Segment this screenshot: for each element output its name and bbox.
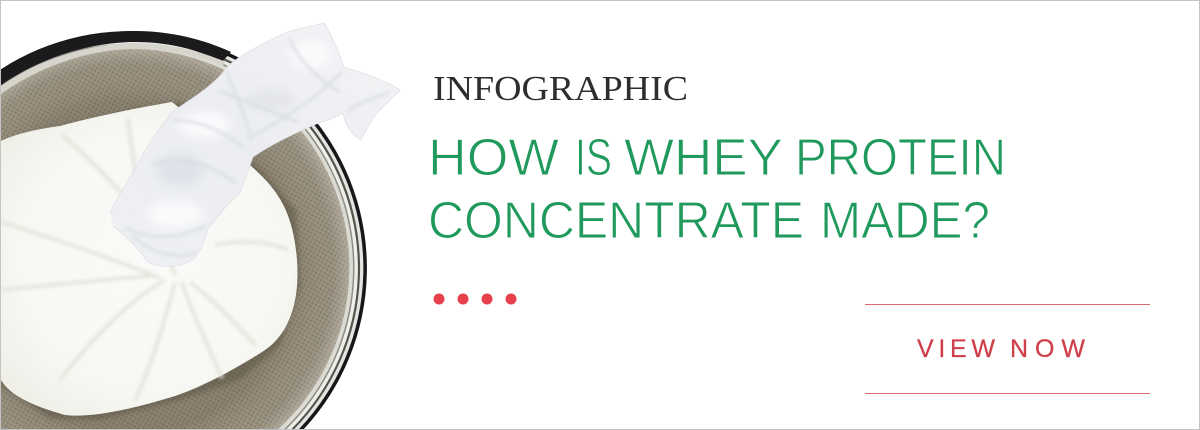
photo: cheesecloth bag in a metal strainer (1, 23, 400, 429)
eyebrow: INFOGRAPHIC: INFOGRAPHIC (433, 69, 688, 108)
cheese bag (1, 102, 298, 416)
red dots (434, 294, 516, 304)
cloth mottling (147, 41, 330, 229)
cloth wrinkles (125, 38, 390, 256)
title: IS (575, 129, 612, 187)
title: HOW (428, 129, 559, 187)
bag shadow (1, 102, 300, 420)
button: view now (865, 304, 1150, 394)
title: MADE? (820, 192, 990, 250)
title (428, 129, 1006, 250)
twisted cloth top (110, 23, 400, 266)
title: CONCENTRATE (428, 192, 804, 250)
bag folds (1, 118, 288, 400)
title: PROTEIN (795, 129, 1006, 187)
button: view now: NOW (1010, 335, 1085, 363)
button: view now: VIEW (917, 335, 995, 363)
title: WHEY (624, 129, 783, 187)
strainer bowl (1, 31, 367, 429)
